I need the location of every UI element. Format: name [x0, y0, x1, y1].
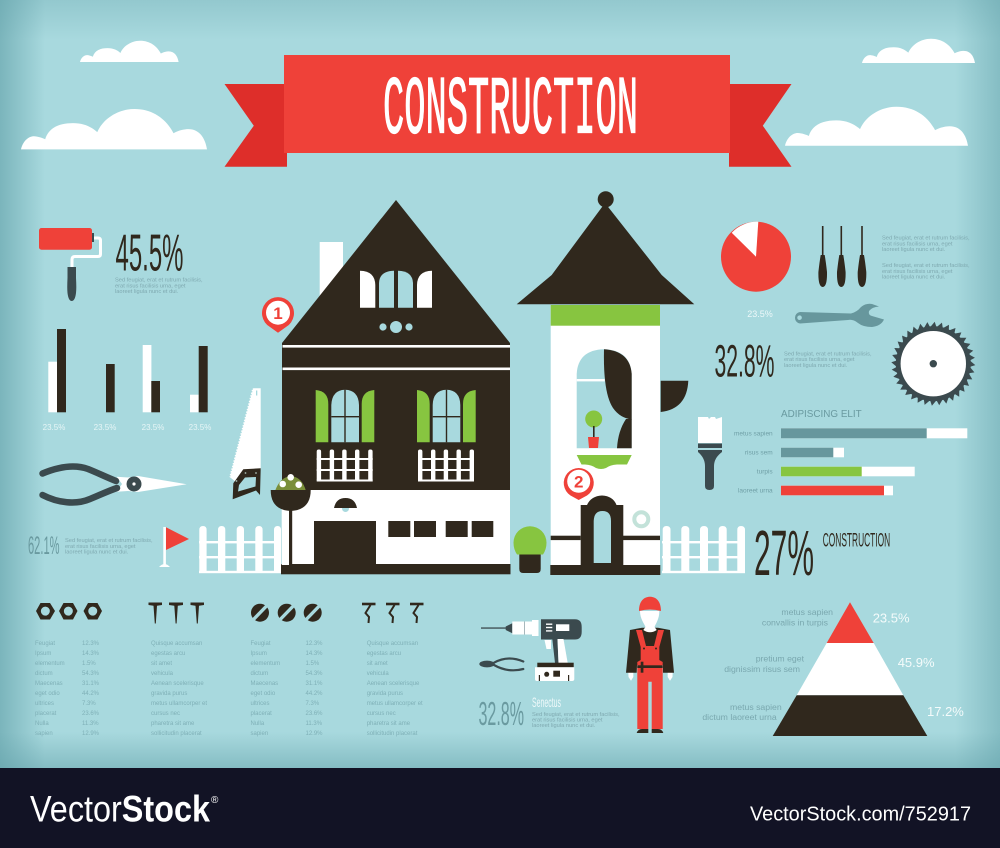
left balcony [317, 450, 373, 482]
pyramid chart: dignissim risus sem [724, 664, 800, 674]
table column 4: Aenean scelerisque [367, 681, 420, 687]
title banner [224, 55, 792, 167]
caption: erat risus facilisis urna, eget [882, 241, 953, 247]
horizontal bar chart: turpis [757, 468, 773, 476]
table column 3: Feugiat [250, 641, 271, 647]
chimney [320, 242, 343, 302]
table column 1: 12.3% [82, 641, 100, 647]
face [640, 611, 659, 632]
table column 2: sit amet [151, 661, 172, 667]
table column 3: 1.5% [306, 661, 320, 667]
tower wall [551, 305, 660, 567]
cloud: left large [21, 109, 207, 149]
table column 3: 7.3% [306, 701, 320, 707]
bar chart [43, 329, 211, 432]
icons: nails [148, 602, 204, 624]
horizontal bar chart [734, 408, 967, 495]
caption: erat risus facilisis urna, eget [65, 544, 136, 550]
footer bar [0, 768, 1000, 848]
text: CONSTRUCTION [823, 530, 890, 552]
roof and upper storey [282, 200, 510, 490]
worker figure [626, 597, 674, 733]
table column 4: gravida purus [367, 691, 403, 697]
table column 4: metus ullamcorper et [367, 701, 423, 707]
table column 3: 12.3% [306, 641, 323, 647]
icon: paint roller [39, 228, 100, 301]
caption [65, 538, 153, 556]
roof ball [598, 191, 614, 207]
table column 2: egestas arcu [151, 651, 185, 657]
right balcony [418, 450, 474, 482]
registered mark: ® [211, 795, 219, 806]
table column 1: Nulla [35, 721, 49, 727]
table column 1 [35, 641, 100, 737]
table column 3: 31.1% [306, 681, 323, 687]
table column 3: 14.3% [306, 651, 323, 657]
roof bands [282, 345, 510, 348]
caption: laoreet ligula nunc et dui. [882, 274, 946, 280]
table column 3: 12.9% [306, 731, 323, 737]
bar chart: 23.5% [189, 423, 211, 432]
tower base [550, 565, 660, 575]
table column 1: dictum [35, 671, 53, 677]
icon: hand saw [229, 388, 261, 499]
table column 3 [250, 641, 323, 737]
fence: left [199, 526, 281, 573]
table column 1: 31.1% [82, 681, 100, 687]
tower door [581, 496, 623, 565]
table column 2: gravida purus [151, 691, 187, 697]
ground floor wall [282, 490, 510, 565]
table column 3: 44.2% [306, 691, 323, 697]
text: 45.5% [116, 225, 184, 283]
icon: small pliers [479, 659, 523, 670]
caption: laoreet ligula nunc et dui. [65, 550, 129, 556]
banner centre [284, 55, 730, 153]
hands [628, 672, 673, 681]
table column 1: 54.3% [82, 671, 100, 677]
icon: pliers [42, 466, 187, 502]
icons: hex nuts [36, 603, 102, 620]
bar chart: 23.5% [142, 423, 164, 432]
table column 4: pharetra sit ame [367, 721, 411, 727]
table column 1: ultrices [35, 701, 54, 707]
potted plant [585, 410, 602, 448]
table column 2: Quisque accumsan [151, 641, 202, 647]
table column 3: placerat [250, 711, 272, 717]
caption: Sed feugiat, erat et rutrum facilisis, [115, 278, 203, 284]
icon: wrench [795, 304, 884, 327]
icon: circular saw blade [891, 322, 975, 406]
table column 2: pharetra sit ame [151, 721, 195, 727]
text: 32.8% [478, 695, 524, 732]
overalls [636, 630, 664, 729]
title banner: CONSTRUCTION [383, 64, 638, 158]
pyramid chart: dictum laoreet urna [702, 712, 777, 722]
table column 4: sit amet [367, 661, 388, 667]
table column 2: cursus nec [151, 711, 180, 717]
pyramid chart: convallis in turpis [762, 618, 829, 628]
table column 1: placerat [35, 711, 57, 717]
text: Senectus [532, 694, 561, 710]
caption: laoreet ligula nunc et dui. [115, 289, 179, 295]
table column 3: Nulla [250, 721, 265, 727]
tower lantern [661, 381, 688, 412]
icons: slotted screws [251, 604, 322, 622]
right window [417, 390, 476, 442]
table column 4: vehicula [367, 671, 389, 677]
table column 2: metus ullamcorper et [151, 701, 207, 707]
table column 3: Ipsum [250, 651, 267, 657]
text: 32.8% [714, 336, 774, 387]
icon: flag [159, 527, 189, 567]
table column 3: sapien [250, 731, 268, 737]
caption: erat risus facilisis urna, eget [784, 357, 855, 363]
pie label: 23.5% [747, 309, 773, 319]
table column 3: ultrices [250, 701, 270, 707]
pin marker 2 [564, 468, 594, 500]
icons: bent nails [362, 604, 424, 623]
attic windows [360, 271, 432, 308]
wall stripe [551, 536, 660, 540]
icon: screwdrivers [818, 226, 866, 287]
footer logo: VectorStock [30, 788, 210, 830]
caption [784, 352, 872, 369]
boots [637, 729, 663, 733]
table column 2: Aenean scelerisque [151, 681, 204, 687]
table column 4 [367, 641, 423, 737]
pyramid chart: 45.9% [898, 655, 935, 670]
shirt [626, 628, 674, 673]
hanging planter [271, 474, 311, 565]
table column 1: eget odio [35, 691, 60, 697]
door [314, 521, 376, 564]
table column 1: 1.5% [82, 661, 96, 667]
pin marker 1: 1 [273, 304, 283, 323]
banner right tail [729, 84, 792, 167]
heading: ADIPISCING ELIT [781, 408, 862, 420]
caption: Sed feugiat, erat et rutrum facilisis, [882, 263, 970, 269]
caption: laoreet ligula nunc et dui. [882, 247, 946, 253]
helmet [639, 597, 661, 611]
caption: Sed feugiat, erat et rutrum facilisis, [65, 538, 153, 544]
table column 1: 14.3% [82, 651, 100, 657]
icon: paint brush [698, 417, 722, 490]
pie chart [721, 222, 791, 292]
ground floor windows [388, 521, 493, 537]
caption [882, 236, 970, 280]
table column 3: eget odio [250, 691, 276, 697]
caption [532, 712, 620, 729]
belt and buckle [637, 648, 663, 673]
potted bush [514, 526, 546, 573]
table column 1: 11.3% [82, 721, 99, 727]
pyramid chart: metus sapien [730, 702, 782, 712]
text: 27% [754, 517, 814, 589]
table column 1: elementum [35, 661, 65, 667]
horizontal bar chart: metus sapien [734, 430, 773, 438]
pyramid chart: 17.2% [927, 704, 964, 719]
table column 4: Quisque accumsan [367, 641, 418, 647]
table column 3: 54.3% [306, 671, 323, 677]
tower roof [517, 203, 694, 304]
bar chart: 23.5% [94, 423, 116, 432]
footer url: VectorStock.com/752917 [750, 804, 971, 826]
table column 1: 44.2% [82, 691, 100, 697]
fence: right [662, 526, 745, 573]
caption: erat risus facilisis urna, eget [532, 718, 603, 724]
caption: Sed feugiat, erat et rutrum facilisis, [882, 236, 970, 242]
tower [517, 191, 694, 575]
table column 1: Maecenas [35, 681, 63, 687]
caption: Sed feugiat, erat et rutrum facilisis, [532, 712, 620, 718]
table column 2: vehicula [151, 671, 174, 677]
window sill [577, 455, 632, 469]
tower window [577, 349, 632, 448]
ring ornament [634, 512, 648, 526]
table column 2 [151, 641, 207, 737]
caption: erat risus facilisis urna, eget [882, 269, 953, 275]
banner left tail [224, 84, 287, 167]
table column 4: sollicitudin placerat [367, 731, 418, 737]
caption: erat risus facilisis urna, eget [115, 283, 186, 289]
green band [551, 305, 660, 326]
table column 1: Ipsum [35, 651, 51, 657]
main house [281, 200, 510, 574]
cloud: top left small [80, 41, 179, 62]
table column 3: dictum [250, 671, 268, 677]
attic vents [379, 321, 413, 333]
table column 4: egestas arcu [367, 651, 401, 657]
icon: cordless drill [481, 619, 582, 681]
cloud: top right small [862, 39, 975, 63]
caption [115, 278, 203, 295]
table column 1: sapien [35, 731, 53, 737]
base [281, 564, 510, 574]
caption: laoreet ligula nunc et dui. [784, 363, 848, 369]
table column 1: 12.9% [82, 731, 100, 737]
table column 3: 11.3% [306, 721, 323, 727]
wall lamp [334, 498, 357, 512]
table column 2: sollicitudin placerat [151, 731, 202, 737]
table column 4: cursus nec [367, 711, 396, 717]
pyramid chart: pretium eget [756, 654, 805, 664]
table column 1: 7.3% [82, 701, 96, 707]
bar chart: 23.5% [43, 423, 65, 432]
pin marker 1 [262, 297, 294, 333]
table column 3: Maecenas [250, 681, 278, 687]
caption: laoreet ligula nunc et dui. [532, 723, 596, 729]
table column 3: elementum [250, 661, 280, 667]
text: 62.1% [28, 532, 60, 560]
cloud: right large [785, 107, 968, 146]
pyramid chart: 23.5% [873, 611, 910, 626]
table column 3: 23.6% [306, 711, 323, 717]
table column 1: 23.6% [82, 711, 100, 717]
horizontal bar chart: laoreet urna [738, 488, 773, 494]
pin marker 2: 2 [574, 472, 583, 492]
left window [316, 390, 374, 442]
pyramid chart [702, 602, 964, 736]
pyramid chart: metus sapien [781, 607, 833, 617]
caption: Sed feugiat, erat et rutrum facilisis, [784, 352, 872, 358]
table column 1: Feugiat [35, 641, 55, 647]
horizontal bar chart: risus sem [745, 450, 773, 456]
